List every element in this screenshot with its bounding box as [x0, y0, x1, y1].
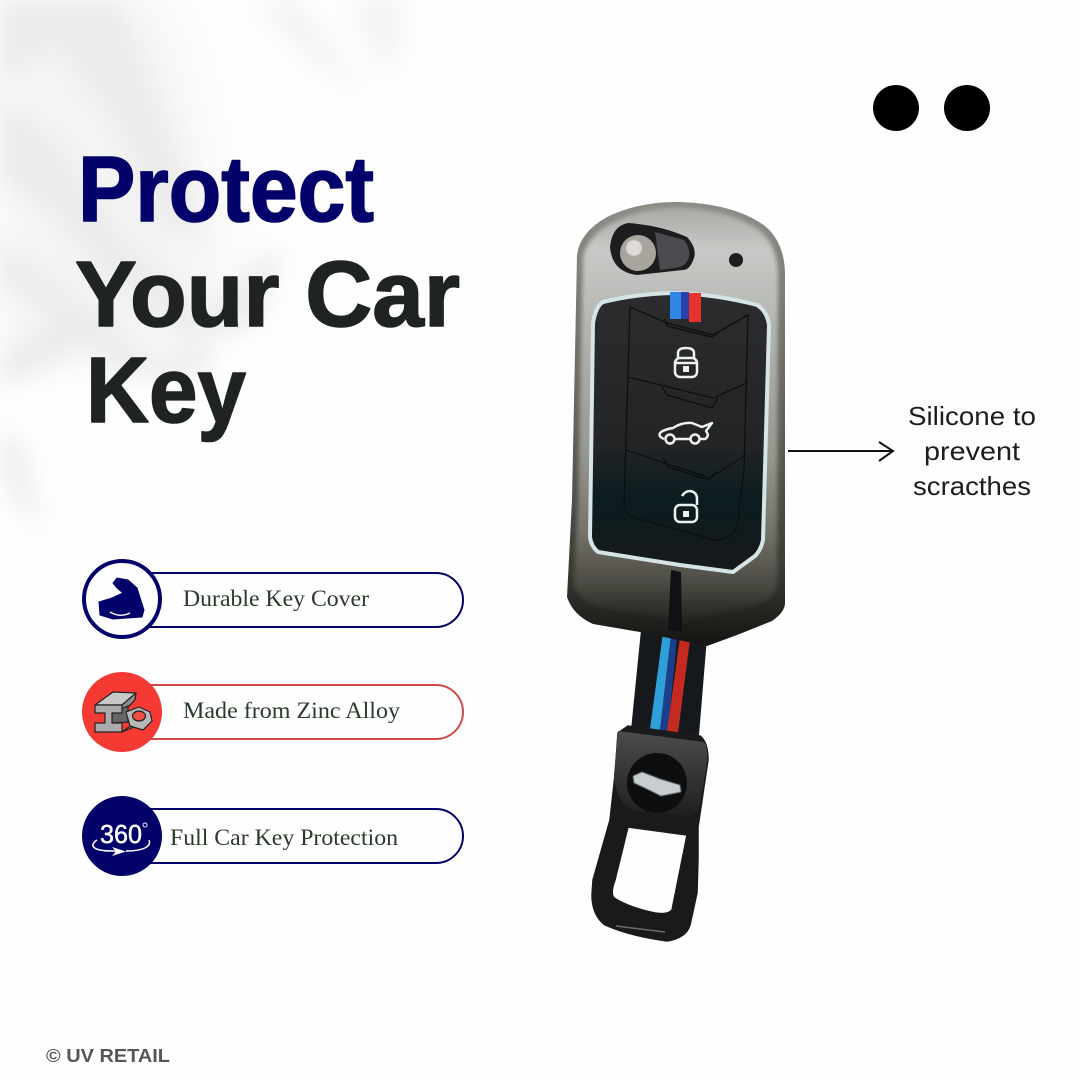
title line: Protect: Protect [78, 137, 374, 241]
icon: 360 degree [82, 796, 162, 876]
metal highlight [574, 208, 778, 622]
key ring clip [592, 726, 708, 941]
feature pill: zinc alloy [82, 672, 463, 752]
icon: car [660, 423, 712, 444]
label: Durable Key Cover [183, 586, 369, 611]
copyright: © UV RETAIL [46, 1046, 170, 1066]
title line: Your Car: Your Car [75, 242, 460, 346]
background leaf shadow [0, 0, 410, 535]
stripes [670, 292, 701, 322]
callout: silicone: prevent [924, 436, 1021, 466]
key blade button [610, 223, 695, 275]
icon: flexed arm [84, 561, 160, 637]
arrow [788, 442, 893, 461]
strap slot [668, 570, 682, 632]
car key product [567, 202, 785, 941]
silicone panel [590, 293, 769, 572]
decorative black dots [873, 85, 990, 131]
callout: silicone: scracthes [913, 471, 1031, 501]
icon: 360 degree: 360 [100, 819, 142, 849]
icon: open lock [675, 491, 697, 522]
feature pill: durable key cover [84, 561, 463, 637]
key fob body [567, 202, 785, 646]
title [75, 137, 460, 442]
button outlines [624, 307, 748, 540]
icon: lock [675, 348, 697, 377]
key strap [631, 618, 708, 735]
feature pill: full protection [82, 796, 463, 876]
icon: steel beam and nut [82, 672, 162, 752]
title line: Key: Key [86, 338, 246, 442]
label: Made from Zinc Alloy [183, 698, 401, 723]
key hole [729, 253, 743, 267]
callout: silicone: Silicone to [908, 401, 1036, 431]
label: Full Car Key Protection [170, 825, 399, 850]
callout: silicone [908, 401, 1036, 501]
